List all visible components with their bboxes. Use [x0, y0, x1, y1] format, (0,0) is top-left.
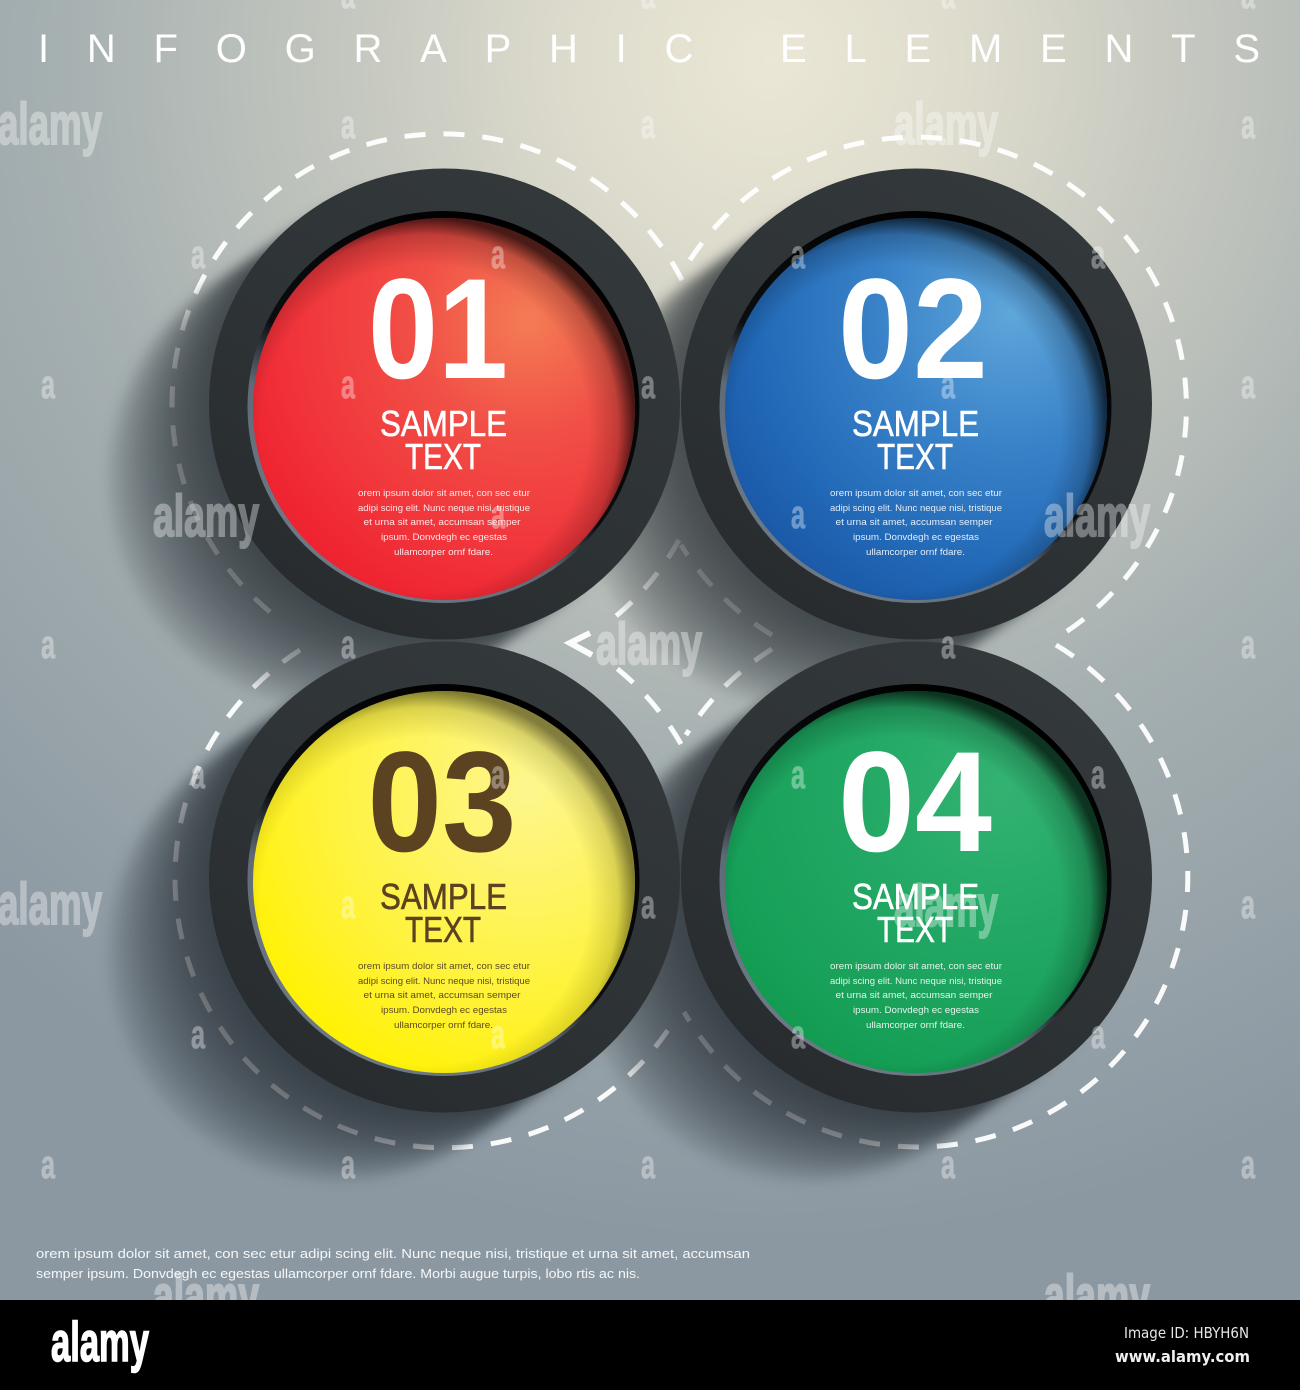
watermark: a [791, 753, 805, 797]
body text 01: ullamcorper ornf fdare. [394, 547, 493, 558]
watermark: a [641, 883, 655, 927]
number 02: 02 [838, 250, 988, 409]
ring 01 [209, 168, 680, 640]
body text 02 [830, 488, 1002, 558]
body text 01: et urna sit amet, accumsan semper [364, 517, 520, 528]
watermark: a [191, 233, 205, 277]
heading 03 [380, 876, 507, 950]
watermark: a [341, 883, 355, 927]
watermark: a [1091, 753, 1105, 797]
footer description text [36, 1246, 750, 1281]
watermark: a [1091, 1013, 1105, 1057]
heading 02 [852, 403, 979, 477]
heading 04: SAMPLE [852, 876, 979, 917]
body text 04: ullamcorper ornf fdare. [866, 1020, 965, 1031]
watermark: alamy [0, 872, 102, 937]
watermark: a [191, 753, 205, 797]
watermark: a [941, 363, 955, 407]
heading 01: TEXT [405, 436, 481, 477]
number 03: 03 [368, 723, 516, 882]
body text 01 [358, 488, 530, 558]
body text 03 [358, 961, 530, 1031]
long drop shadows [109, 181, 1136, 1181]
footer description text: orem ipsum dolor sit amet, con sec etur adipi scing elit. Nunc neque nisi, tristique et urna sit amet, accumsan [36, 1246, 750, 1261]
heading 01 [380, 403, 507, 477]
bottom black bar [0, 1300, 1300, 1390]
watermark: a [41, 623, 55, 667]
disc 04 [725, 691, 1107, 1073]
ring 04 [681, 642, 1152, 1112]
watermark: a [791, 1013, 805, 1057]
body text 03: ipsum. Donvdegh ec egestas [381, 1005, 507, 1016]
watermark: a [791, 493, 805, 537]
watermark: a [1241, 623, 1255, 667]
disc 01 [253, 218, 635, 600]
watermark: a [791, 233, 805, 277]
body text 04: adipi scing elit. Nunc neque nisi, tristique [830, 976, 1002, 987]
watermark: a [491, 753, 505, 797]
title: INFOGRAPHIC ELEMENTS [38, 27, 1260, 71]
watermark: alamy [0, 92, 102, 157]
watermark: a [641, 103, 655, 147]
watermark: a [491, 1013, 505, 1057]
watermark: alamy [596, 612, 702, 677]
disc 03 [253, 691, 635, 1073]
watermark: a [941, 623, 955, 667]
watermark: a [1241, 1143, 1255, 1187]
watermark: a [341, 363, 355, 407]
image id: Image ID: HBYH6N [1124, 1324, 1249, 1342]
watermark: a [641, 363, 655, 407]
watermark: alamy [894, 92, 998, 157]
heading 04 [852, 876, 979, 950]
number 01: 01 [368, 250, 508, 409]
heading 03: TEXT [405, 909, 481, 950]
body text 01: ipsum. Donvdegh ec egestas [381, 532, 507, 543]
body text 02: orem ipsum dolor sit amet, con sec etur [830, 488, 1002, 499]
footer description text: semper ipsum. Donvdegh ec egestas ullamcorper ornf fdare. Morbi augue turpis, lobo rtis ac nis. [36, 1266, 640, 1281]
website: www.alamy.com [1115, 1347, 1250, 1366]
watermark: a [491, 493, 505, 537]
body text 03: orem ipsum dolor sit amet, con sec etur [358, 961, 530, 972]
heading 03: SAMPLE [380, 876, 507, 917]
body text 02: ullamcorper ornf fdare. [866, 547, 965, 558]
body text 02: ipsum. Donvdegh ec egestas [853, 532, 979, 543]
heading 02: TEXT [877, 436, 953, 477]
watermark: a [641, 1143, 655, 1187]
ring 03 [209, 642, 680, 1112]
watermark: a [191, 1013, 205, 1057]
body text 04: ipsum. Donvdegh ec egestas [853, 1005, 979, 1016]
body text 03: et urna sit amet, accumsan semper [364, 990, 520, 1001]
watermark: a [941, 1143, 955, 1187]
body text 01: orem ipsum dolor sit amet, con sec etur [358, 488, 530, 499]
watermark: a [1091, 233, 1105, 277]
watermark: alamy [894, 874, 998, 939]
heading 02: SAMPLE [852, 403, 979, 444]
watermark: a [491, 233, 505, 277]
watermark: a [1241, 103, 1255, 147]
watermark: alamy [1044, 484, 1150, 549]
heading 01: SAMPLE [380, 403, 507, 444]
body text 01: adipi scing elit. Nunc neque nisi, tristique [358, 503, 530, 514]
watermark: a [1241, 363, 1255, 407]
watermark: alamy [153, 1264, 259, 1329]
number 04: 04 [838, 723, 992, 882]
panel 04: green circle [681, 642, 1152, 1112]
panel 02: blue circle [681, 168, 1152, 640]
watermark: a [1241, 883, 1255, 927]
heading 04: TEXT [877, 909, 953, 950]
watermark: alamy [1044, 1264, 1150, 1329]
panel 03: yellow circle [209, 642, 680, 1112]
watermark: a [41, 363, 55, 407]
body text 03: ullamcorper ornf fdare. [394, 1020, 493, 1031]
watermark: a [41, 1143, 55, 1187]
body text 04: et urna sit amet, accumsan semper [836, 990, 992, 1001]
dashed connector path [172, 134, 1188, 1148]
body text 04 [830, 961, 1002, 1031]
ring 02 [681, 168, 1152, 640]
panel 01: red circle [209, 168, 680, 640]
body text 02: adipi scing elit. Nunc neque nisi, tristique [830, 503, 1002, 514]
disc 02 [725, 218, 1107, 600]
watermark: alamy [153, 484, 259, 549]
body text 02: et urna sit amet, accumsan semper [836, 517, 992, 528]
watermark: a [341, 1143, 355, 1187]
watermark: a [341, 103, 355, 147]
alamy logo: alamy [51, 1310, 149, 1373]
watermark: a [341, 623, 355, 667]
body text 04: orem ipsum dolor sit amet, con sec etur [830, 961, 1002, 972]
body text 03: adipi scing elit. Nunc neque nisi, tristique [358, 976, 530, 987]
